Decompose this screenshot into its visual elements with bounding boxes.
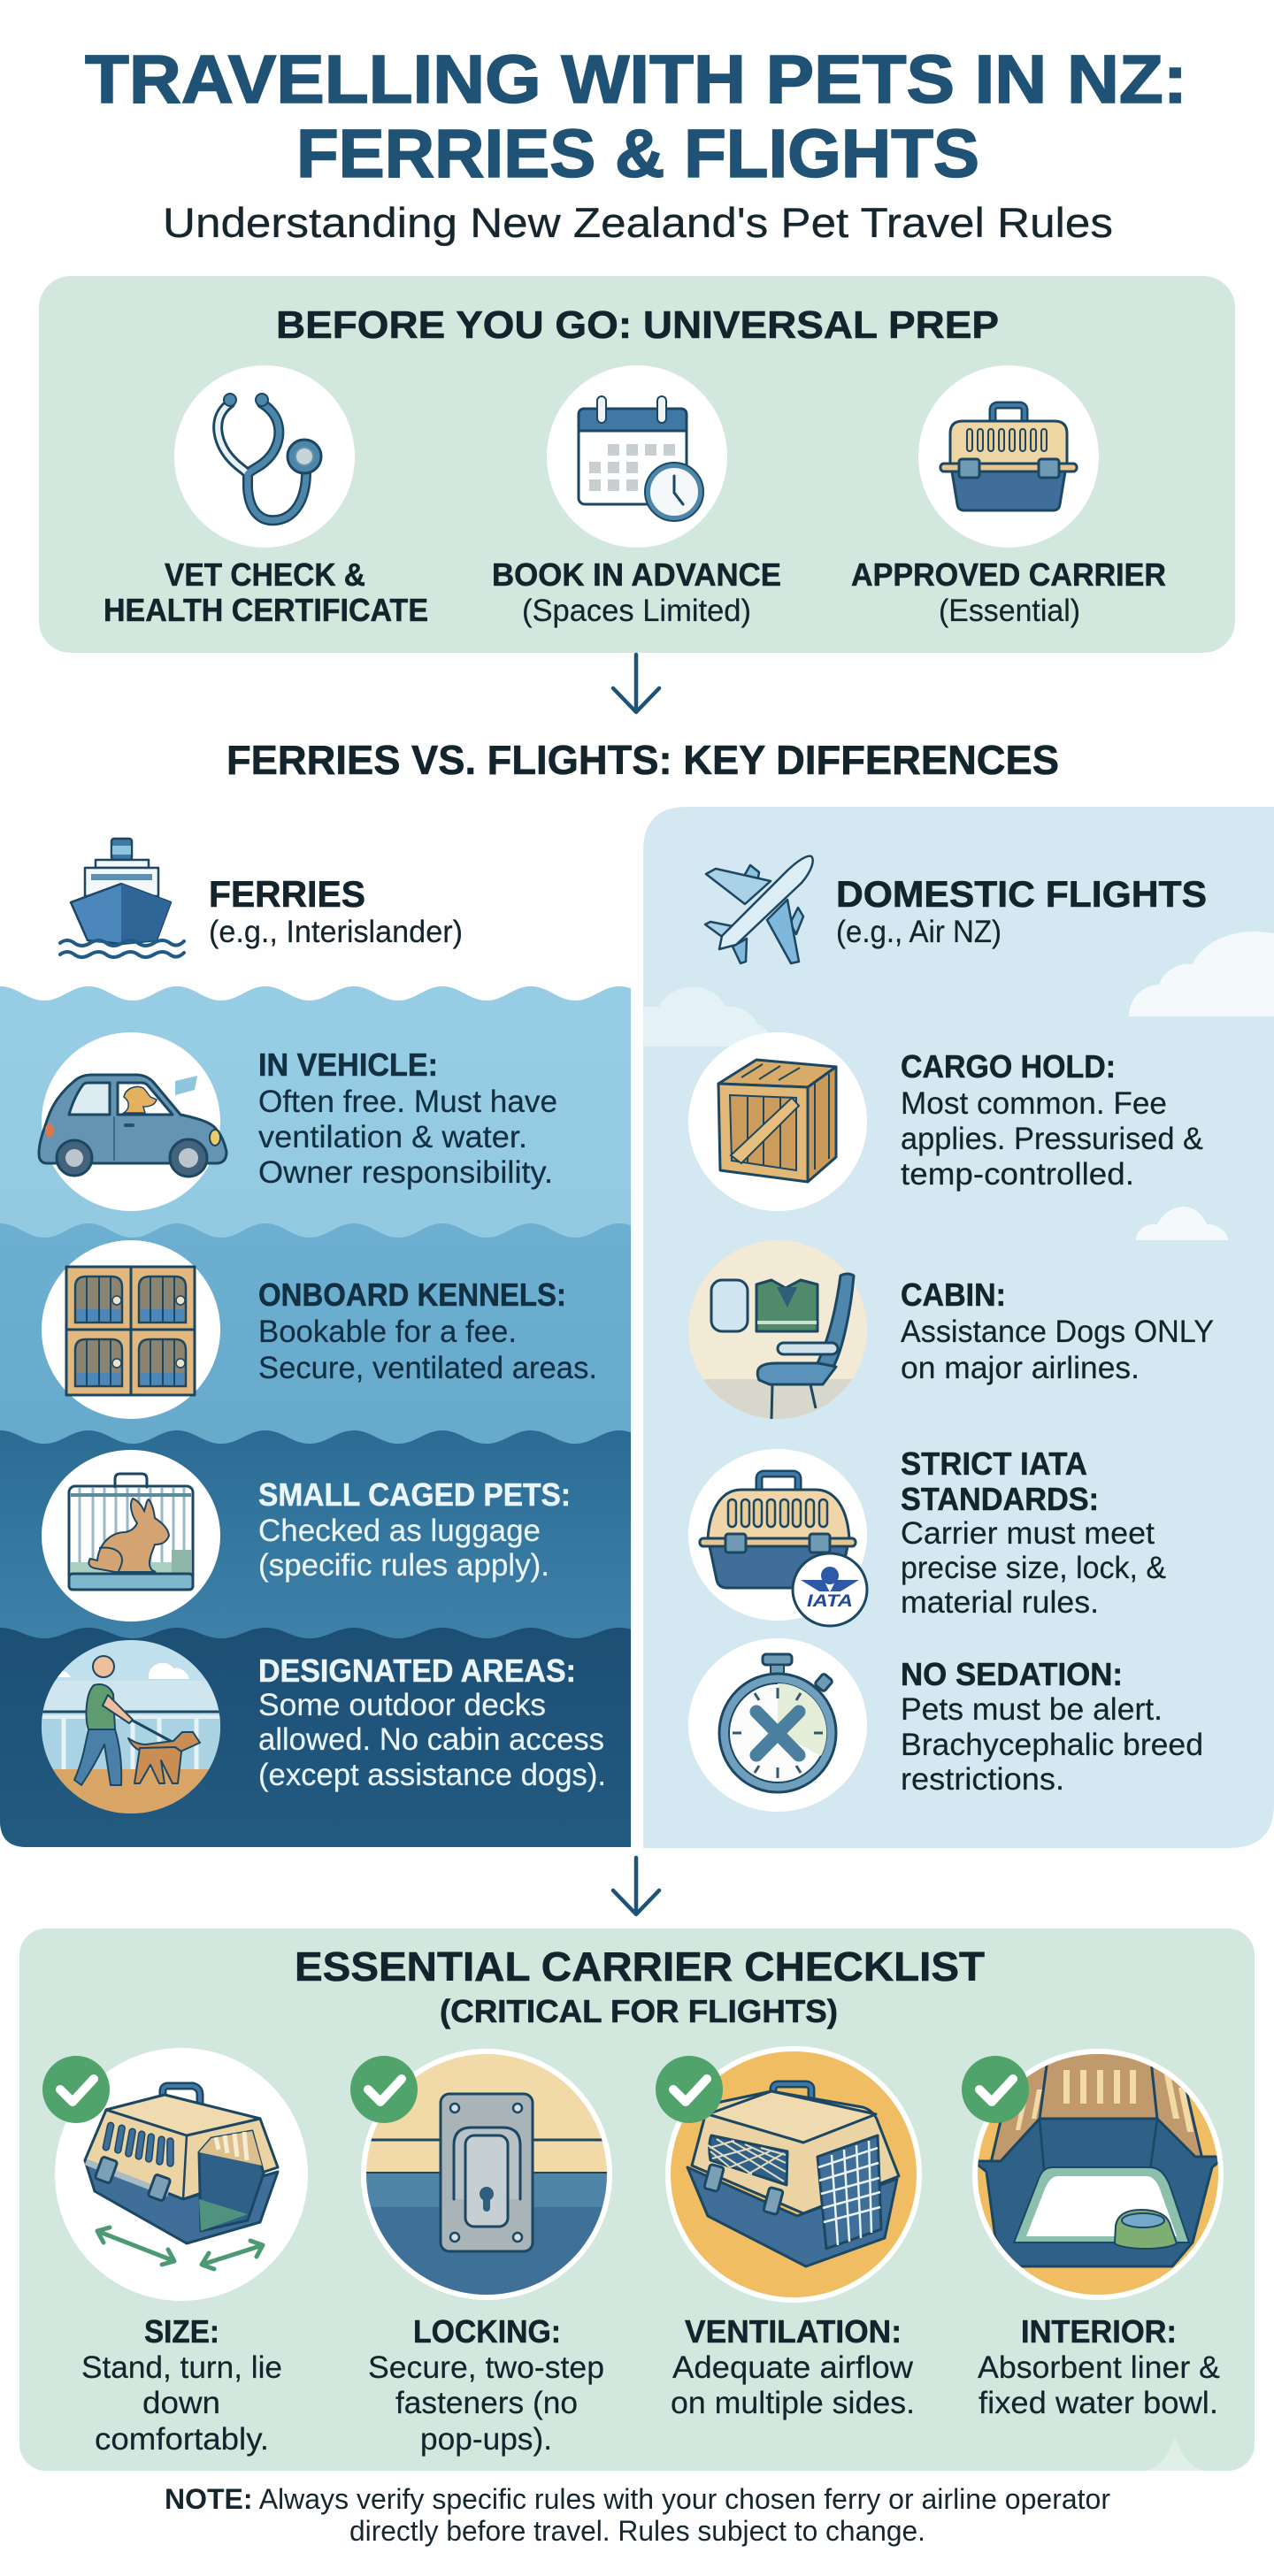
text: locking: pop-ups). [420,2422,552,2457]
text: no sedation: restrictions. [901,1762,1064,1797]
icon: plane [705,856,813,963]
title: TRAVELLING WITH PETS IN NZ: [85,42,1187,118]
text: onboard kennels: Bookable for a fee. [258,1315,517,1349]
text: designated areas: allowed. No cabin access [258,1722,604,1757]
icon: cargo crate [688,1032,867,1211]
subtitle: Understanding New Zealand's Pet Travel Rules [163,199,1113,246]
text: cabin: CABIN: [901,1276,1006,1313]
text: size: down [142,2386,220,2420]
text: locking: fasteners (no [395,2386,578,2420]
icon: rabbit in cage [42,1450,220,1622]
text: ferries header [209,873,463,949]
text: cabin: on major airlines. [901,1351,1140,1385]
label: book in advance: (Spaces Limited) [522,594,751,628]
icon: IATA carrier [688,1449,867,1626]
label: vet check [104,556,428,628]
text: in vehicle: Owner responsibility. [258,1155,553,1190]
text: domestic flights header [836,873,1207,949]
text: onboard kennels: ONBOARD KENNELS: [258,1276,566,1313]
text: onboard kennels: Secure, ventilated areas. [258,1351,597,1385]
text: in vehicle: Often free. Must have [258,1085,557,1119]
item: ventilation [668,2049,919,2300]
text: locking: LOCKING: [413,2313,561,2350]
text: no sedation: NO SEDATION: [901,1656,1123,1692]
text: cabin [901,1276,1214,1385]
text: strict IATA standards: STANDARDS: [901,1481,1099,1517]
text: small caged pets: SMALL CAGED PETS: [258,1476,571,1513]
text: ventilation: VENTILATION: [685,2313,902,2350]
text: cargo hold: temp-controlled. [901,1157,1134,1192]
title [85,42,1187,192]
item: interior [972,2049,1230,2300]
text: in vehicle: ventilation & water. [258,1120,527,1154]
item: locking [354,2043,619,2304]
text: ferries header: FERRIES [209,873,365,915]
check badge: interior [962,2056,1029,2123]
text: designated areas [258,1652,606,1792]
icon: pet carrier [918,365,1099,548]
text: designated areas: (except assistance dogs). [258,1758,606,1792]
icon: ship [60,839,184,957]
label: book in advance: BOOK IN ADVANCE [492,556,781,593]
text: interior: fixed water bowl. [979,2386,1218,2420]
item: size [55,2048,308,2301]
text: in vehicle [258,1046,557,1190]
text: locking [368,2313,604,2457]
text: small caged pets: Checked as luggage [258,1514,541,1548]
label: approved carrier: (Essential) [939,594,1080,628]
label: book in advance [492,556,781,628]
text: cabin: Assistance Dogs ONLY [901,1315,1214,1349]
text: cargo hold: Most common. Fee [901,1086,1167,1121]
text: no sedation: Brachycephalic breed [901,1728,1203,1762]
text: interior [978,2313,1220,2420]
cloud: upper right [1129,932,1274,1016]
notch detail [1145,2437,1206,2471]
text: strict IATA standards: Carrier must meet [901,1516,1155,1551]
text: size: SIZE: [144,2313,219,2350]
badge: IATA: IATA [807,1592,853,1611]
text: domestic flights header: DOMESTIC FLIGHTS [836,873,1207,915]
checklist heading: ESSENTIAL CARRIER CHECKLIST [295,1944,985,1990]
text: no sedation: Pets must be alert. [901,1692,1163,1727]
text: no sedation [901,1656,1203,1797]
text: ventilation [671,2313,915,2420]
wave layers [0,986,664,1847]
heading: key differences: FERRIES VS. FLIGHTS: KEY DIFFERENCES [226,737,1059,783]
icon: aircraft cabin seat [688,1240,867,1419]
footnote [165,2483,1110,2547]
check badge: locking [350,2056,418,2123]
text: strict IATA standards: STRICT IATA [901,1445,1087,1482]
checklist heading: (CRITICAL FOR FLIGHTS) [440,1993,838,2029]
icon: stopwatch no sedation [688,1638,867,1812]
icon: onboard kennels [42,1240,220,1419]
text: in vehicle: IN VEHICLE: [258,1046,438,1083]
checklist heading [295,1944,985,2029]
icon: car with dog [39,1032,226,1211]
text: cargo hold: applies. Pressurised & [901,1122,1203,1156]
label: vet check: VET CHECK & [165,556,365,593]
cloud: small right [1136,1207,1228,1240]
text: designated areas: DESIGNATED AREAS: [258,1652,576,1689]
text: interior: INTERIOR: [1021,2313,1177,2350]
arrow: down to comparison [613,655,659,712]
text: small caged pets: (specific rules apply). [258,1548,549,1583]
text: strict IATA standards: material rules. [901,1585,1099,1620]
text: onboard kennels [258,1276,597,1385]
text: strict IATA standards: precise size, lock, & [901,1551,1166,1585]
text: size [81,2313,282,2457]
text: locking: Secure, two-step [368,2350,604,2385]
text: domestic flights header: (e.g., Air NZ) [836,915,1002,949]
panel: domestic flights [643,807,1274,1848]
arrow: down to checklist [613,1858,659,1914]
icon: person walking dog on deck [42,1640,220,1813]
icon: calendar and clock [547,365,727,548]
text: ferries header: (e.g., Interislander) [209,915,463,949]
text: interior: Absorbent liner & [978,2350,1220,2385]
text: cargo hold [901,1048,1203,1192]
panel heading: BEFORE YOU GO: UNIVERSAL PREP [276,303,999,347]
text: small caged pets [258,1476,571,1583]
check badge: ventilation [656,2056,723,2123]
text: ventilation: on multiple sides. [671,2386,915,2420]
cloud: left [643,987,775,1046]
badge: IATA [793,1553,867,1626]
text: ventilation: Adequate airflow [672,2350,914,2385]
text: cargo hold: CARGO HOLD: [901,1048,1116,1085]
check badge: size [42,2056,110,2123]
footnote: directly before travel. Rules subject to change. [349,2515,925,2547]
label: approved carrier [851,556,1166,628]
text: size: Stand, turn, lie [81,2350,282,2385]
panel: ferries [0,839,664,1847]
label: approved carrier: APPROVED CARRIER [851,556,1166,593]
text: size: comfortably. [95,2422,269,2457]
title: FERRIES & FLIGHTS [296,116,979,192]
footnote: NOTE: Always verify specific rules with your chosen ferry or airline operator [165,2483,1110,2515]
panel: essential carrier checklist [19,1928,1255,2471]
text: designated areas: Some outdoor decks [258,1688,546,1722]
panel: before you go [39,276,1235,653]
text: strict IATA standards [901,1445,1166,1620]
icon: stethoscope [174,365,355,548]
label: vet check: HEALTH CERTIFICATE [104,592,428,628]
